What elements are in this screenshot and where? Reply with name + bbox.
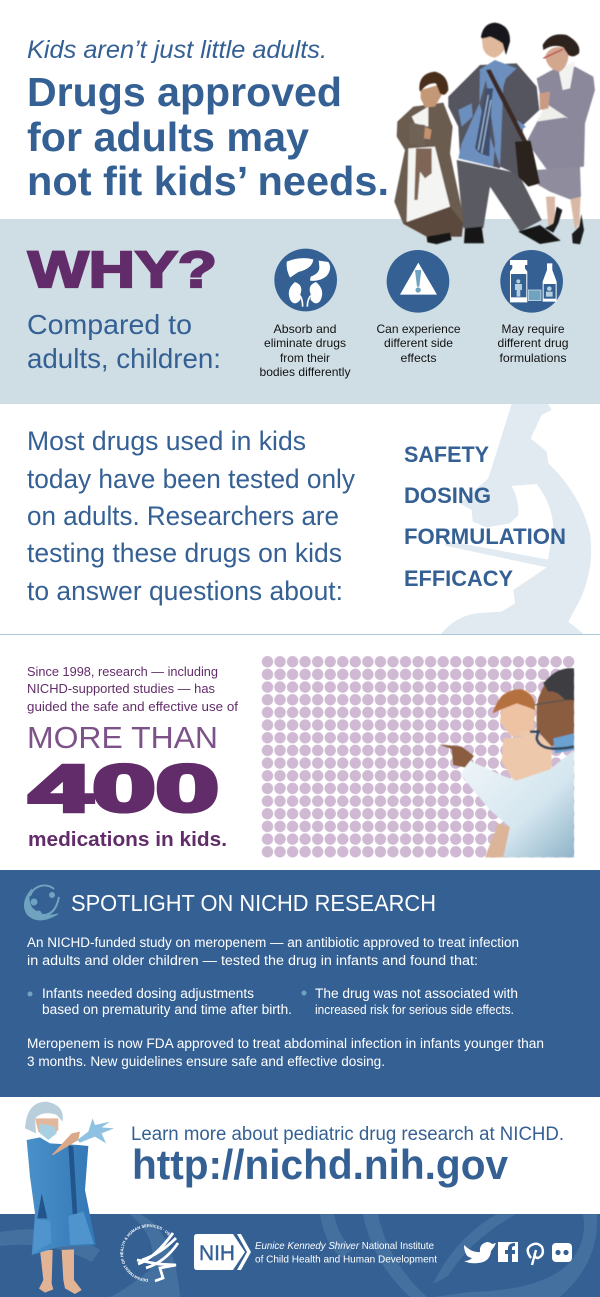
text: most drugs tested on adults [27,426,355,606]
figure: boy in gray suit with satchel [448,23,561,244]
bullet: side effects [302,986,518,1017]
heading: why: WHY? [28,241,217,298]
text: most drugs tested on adults: today have been tested only [27,464,355,494]
list: research questions [404,442,566,591]
caption: absorb and eliminate: from their [280,351,330,365]
bullet: dosing adjustments [28,986,292,1017]
logo: NIH: NIH [199,1242,235,1265]
link: nichd url: http://nichd.nih.gov [132,1141,509,1188]
caption: side effects: different side [384,336,453,350]
text: medications in kids: medications in kids. [28,829,227,851]
caption: absorb and eliminate: eliminate drugs [264,336,346,350]
text: most drugs tested on adults: to answer questions about: [27,576,343,606]
dot grid [261,655,575,858]
caption: drug formulations: formulations [500,351,566,365]
band: why section background [0,219,600,404]
bullet: dosing adjustments: based on prematurity and time after birth. [42,1002,292,1017]
text: compared to adults: adults, children: [27,343,221,374]
heading: kids aren't just little adults: not fit kids’ needs. [27,158,389,204]
text: since 1998: guided the safe and effective use of [27,699,238,714]
icon: medicine formulations [500,250,563,313]
text: more than: MORE THAN [27,720,218,755]
text: FDA approval [27,1036,544,1069]
list: research questions: SAFETY [404,442,489,467]
text: FDA approval: 3 months. New guidelines ensure safe and effective dosing. [27,1054,385,1069]
text: study description: in adults and older children — tested the drug in infants and found that: [27,953,478,968]
illustration: three kids in oversized adult clothes [394,23,595,244]
icon: twitter [464,1242,496,1263]
icon: warning triangle [387,250,449,313]
icon: pinterest [528,1244,543,1265]
icon: facebook [498,1242,518,1262]
figure: child in surgical gown [25,1102,114,1294]
list: research questions: EFFICACY [404,566,513,591]
heading: kids aren't just little adults: Kids aren’t just little adults. [27,36,327,64]
icon: organs [274,249,337,311]
heading: kids aren't just little adults: for adults may [27,114,309,160]
text: most drugs tested on adults: Most drugs used in kids [27,426,306,456]
number: 400: 400 [29,751,219,825]
caption: side effects [376,322,461,365]
figure: curly-haired child in brown coat [394,72,463,244]
text: FDA approval: Meropenem is now FDA approved to treat abdominal infection in infants younger than [27,1036,544,1051]
caption: drug formulations [498,322,568,365]
icon: flickr [552,1243,572,1262]
text: study description: An NICHD-funded study on meropenem — an antibiotic approved to treat infection [27,935,519,950]
photo: doctor holding child [439,668,574,857]
logo: HHS eagle: DEPARTMENT OF HEALTH & HUMAN SERVICES · USA [120,1224,170,1282]
bullet: side effects: The drug was not associated with [315,986,518,1001]
icon: spotlight swirl [24,885,59,920]
text: compared to adults [27,309,221,374]
text: since 1998: NICHD-supported studies — has [27,681,215,696]
text: study description [27,935,519,968]
heading: kids aren't just little adults: Drugs approved [27,69,342,115]
caption: drug formulations: May require [502,322,565,336]
bullet: side effects: increased risk for serious side effects. [315,1002,514,1017]
icon: microscope watermark [441,404,591,634]
panel: spotlight on NICHD research [0,870,600,1097]
logo: NIH [194,1234,251,1270]
caption: side effects: Can experience [376,322,461,336]
caption: absorb and eliminate: Absorb and [274,322,336,336]
caption: side effects: effects [400,351,436,365]
text: institute name [255,1240,437,1266]
caption: drug formulations: different drug [498,336,568,350]
text: most drugs tested on adults: testing these drugs on kids [27,538,342,568]
text: since 1998: Since 1998, research — including [27,664,218,679]
text: most drugs tested on adults: on adults. Researchers are [27,501,339,531]
heading: kids aren't just little adults [27,36,389,204]
bullet: dosing adjustments: Infants needed dosing adjustments [42,986,254,1001]
heading: spotlight: SPOTLIGHT ON NICHD RESEARCH [71,890,436,916]
text: institute name: Eunice Kennedy Shriver National Institute [255,1240,434,1252]
text: since 1998 [27,664,238,714]
text: learn more: Learn more about pediatric drug research at NICHD. [131,1124,564,1145]
list: research questions: DOSING [404,483,491,508]
text: institute name: of Child Health and Human Development [255,1254,437,1266]
list: research questions: FORMULATION [404,524,566,549]
figure: girl in lavender suit [527,34,595,244]
caption: absorb and eliminate [260,322,350,379]
footer band [0,1214,600,1297]
text: compared to adults: Compared to [27,309,192,340]
caption: absorb and eliminate: bodies differently [260,365,350,379]
